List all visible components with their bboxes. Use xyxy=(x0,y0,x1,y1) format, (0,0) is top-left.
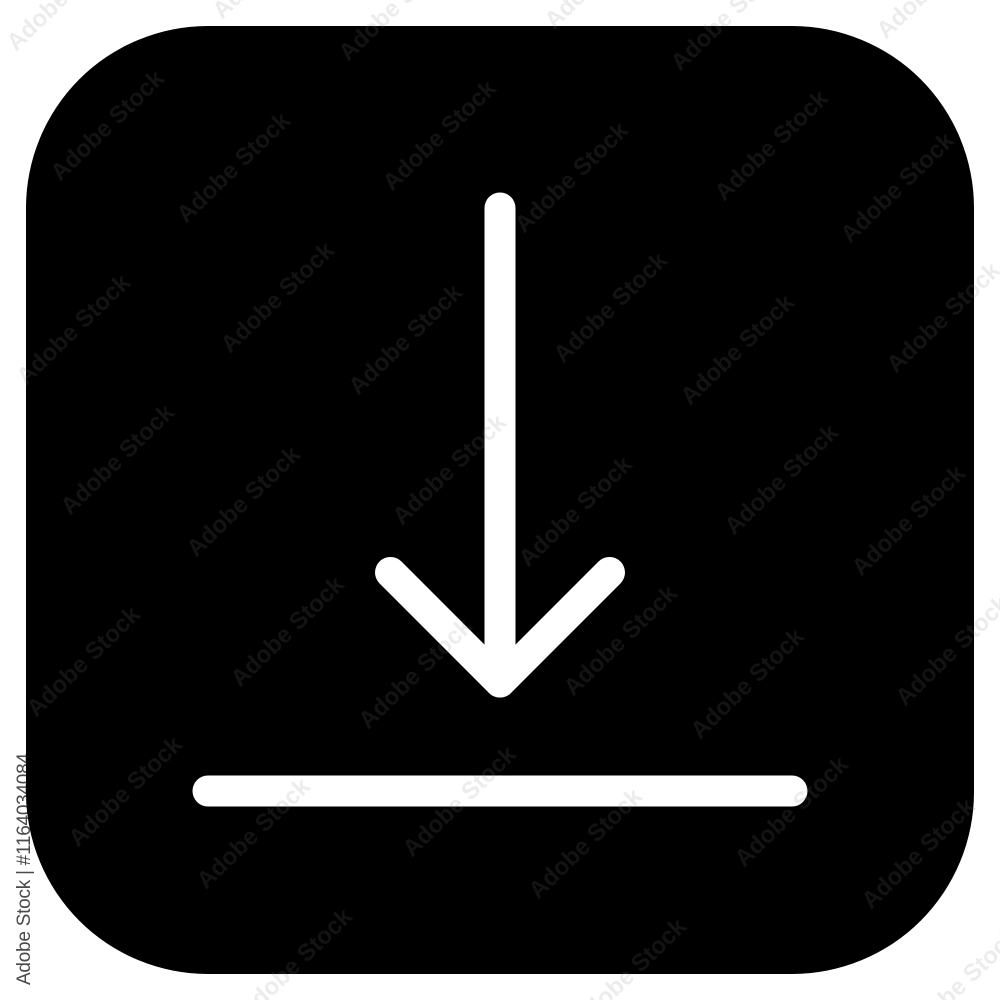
watermark: repeated text: Adobe Stock xyxy=(729,751,854,872)
watermark: repeated text: Adobe Stock xyxy=(835,127,960,248)
watermark: repeated text: Adobe Stock xyxy=(377,75,502,196)
watermark: repeated text: Adobe Stock xyxy=(343,279,468,400)
watermark: repeated text: Adobe Stock xyxy=(675,289,800,410)
watermark: repeated text: Adobe Stock xyxy=(225,571,350,692)
arrow: down xyxy=(390,208,610,682)
watermark: repeated text: Adobe Stock xyxy=(719,419,844,540)
watermark: repeated text: Adobe Stock xyxy=(397,741,522,862)
watermark: stock id: Adobe Stock | #1164034084 xyxy=(14,753,35,985)
watermark: repeated text: Adobe Stock xyxy=(509,117,634,238)
watermark: repeated text: Adobe Stock xyxy=(353,613,478,734)
watermark: repeated text: Adobe Stock xyxy=(11,269,136,390)
watermark: repeated text: Adobe Stock xyxy=(171,107,296,228)
watermark: repeated text: Adobe Stock xyxy=(548,247,673,368)
watermark: repeated text: Adobe Stock xyxy=(55,399,180,520)
watermark: repeated text: Adobe Stock xyxy=(513,451,638,572)
watermark: repeated text: Adobe Stock xyxy=(181,441,306,562)
watermark: repeated text: Adobe Stock xyxy=(856,793,981,914)
baseline bar xyxy=(208,776,792,806)
watermark: repeated text: Adobe Stock xyxy=(21,601,146,722)
watermark: repeated text: Adobe Stock xyxy=(63,731,188,852)
watermark: repeated text: Adobe Stock xyxy=(558,580,683,701)
watermark: repeated text: Adobe Stock xyxy=(709,85,834,206)
watermark: repeated text: Adobe Stock xyxy=(387,409,512,530)
watermark: repeated text: Adobe Stock xyxy=(215,237,340,358)
watermark: repeated text: Adobe Stock xyxy=(45,65,170,186)
watermark: repeated text: Adobe Stock xyxy=(846,460,971,581)
watermark: repeated text: Adobe Stock xyxy=(191,773,316,894)
watermark: repeated text: Adobe Stock xyxy=(523,783,648,904)
watermark: repeated text: Adobe Stock xyxy=(685,623,810,744)
